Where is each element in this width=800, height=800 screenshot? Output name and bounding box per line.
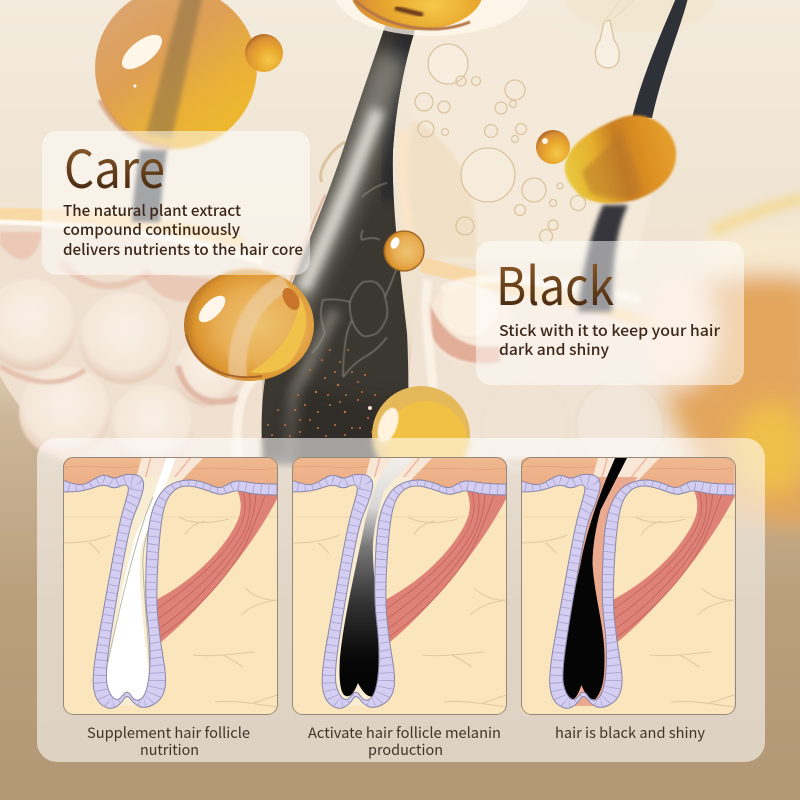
text block: black description: dark and shiny xyxy=(499,339,609,360)
text block: care description: The natural plant extract xyxy=(63,200,241,221)
white ring around hair root xyxy=(237,279,640,470)
panel: care xyxy=(42,131,310,275)
capsule: small center xyxy=(384,230,424,272)
text block: black description: Stick with it to keep your hair xyxy=(499,320,721,341)
hair: grey fading to black xyxy=(339,457,414,696)
background: golden band xyxy=(0,208,720,352)
caption: stage 3: hair is black and shiny xyxy=(555,722,705,743)
left hair strand behind big capsule xyxy=(132,150,167,222)
far right hair strand xyxy=(578,0,688,312)
capsule: bottom center xyxy=(372,386,470,484)
heading: black: Black xyxy=(496,245,614,320)
capsule: right with small bead xyxy=(536,115,676,203)
hair: black xyxy=(560,457,628,700)
main hair strand with follicle bulb xyxy=(255,15,420,470)
tan micro bubbles xyxy=(321,0,636,242)
hair: white xyxy=(106,457,176,701)
card: stage 2 follicle xyxy=(292,457,507,715)
panel: follicle stages xyxy=(37,438,765,762)
text block: black description xyxy=(499,320,721,360)
text block: care description: delivers nutrients to the hair core xyxy=(63,239,303,260)
capsule: top center xyxy=(334,0,530,36)
background: lower bubble bowl xyxy=(0,222,720,469)
caption: stage 1: Supplement hair follicle xyxy=(87,722,250,743)
caption: stage 1: nutrition xyxy=(140,739,199,760)
card: stage 1 follicle xyxy=(63,457,278,715)
captions xyxy=(87,722,705,760)
yellow edge of blurred capsule xyxy=(712,198,800,232)
panel: black xyxy=(476,241,744,385)
blurred orange glow at right xyxy=(644,224,800,530)
caption: stage 2 xyxy=(308,722,501,760)
background: pale oil droplet shape xyxy=(403,0,715,262)
copper speckles xyxy=(267,349,383,437)
hair scale cracks xyxy=(312,183,396,377)
card: stage 3 follicle xyxy=(521,457,736,715)
caption: stage 1 xyxy=(87,722,250,760)
caption: stage 2: Activate hair follicle melanin xyxy=(308,722,501,743)
capsule: large top left xyxy=(95,0,283,149)
caption: stage 2: production xyxy=(368,739,443,760)
capsule: mid left xyxy=(184,269,314,381)
text block: care description xyxy=(63,200,303,260)
text block: care description: compound continuously xyxy=(63,219,240,240)
